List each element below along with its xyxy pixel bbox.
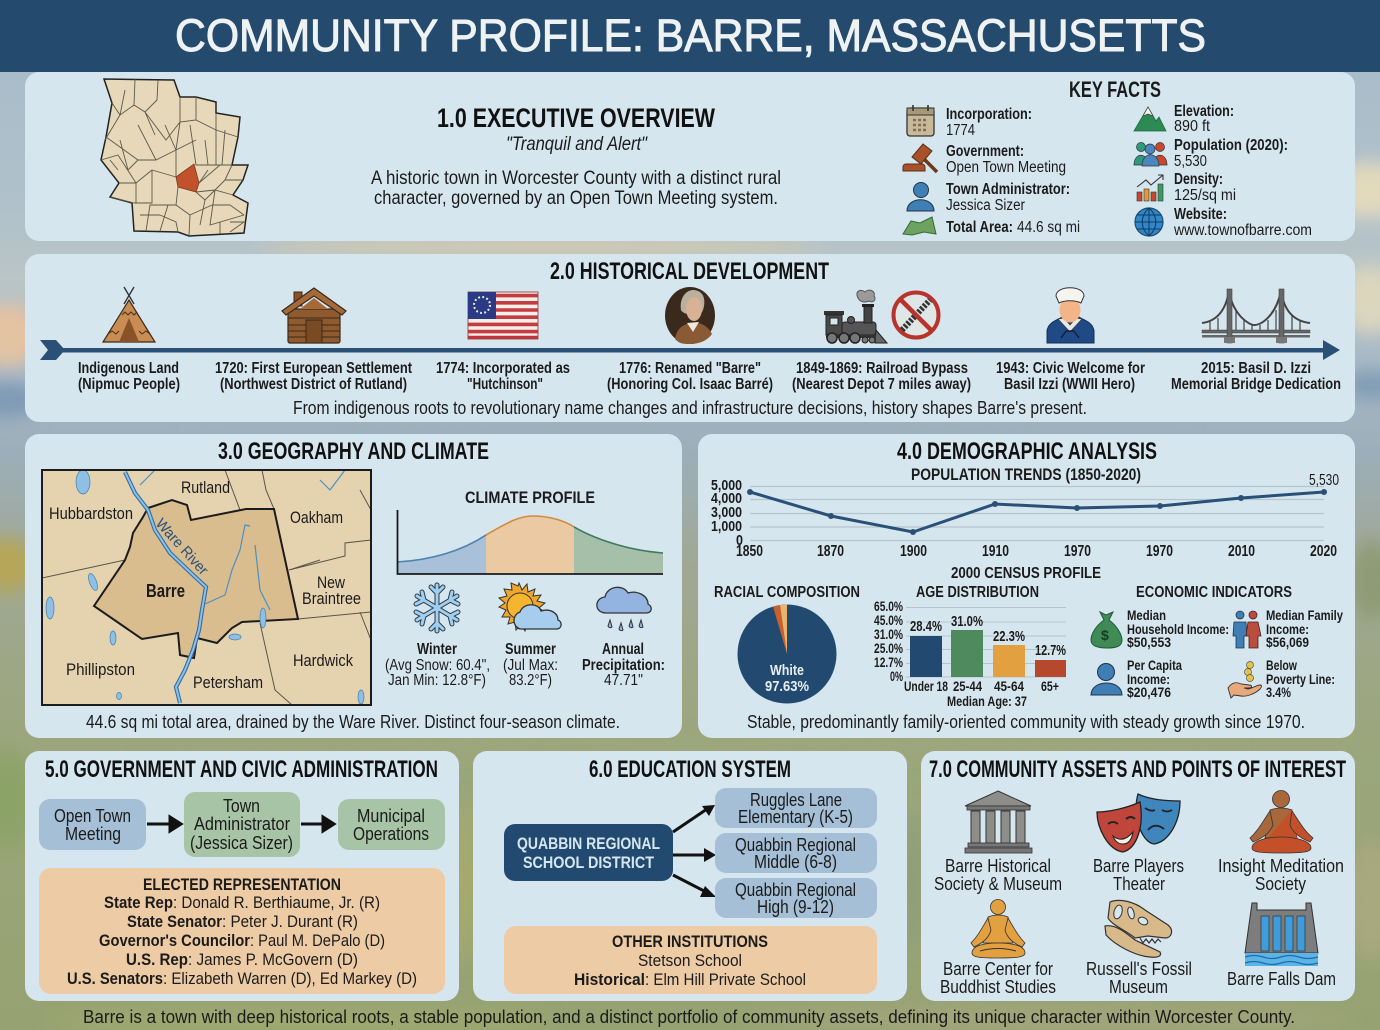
icon: hand with coins (1228, 662, 1262, 698)
label: Buddhist studies (940, 959, 1056, 997)
elected representation box: : Peter J. Durant (R) (222, 912, 358, 931)
timeline arrow (40, 340, 1340, 360)
population line chart: 2010 (1228, 543, 1255, 560)
label: insight meditation: Insight Meditation (1218, 856, 1344, 876)
population line chart: 3,000 (711, 505, 742, 521)
population line chart: 1850 (736, 543, 763, 560)
panel: 1.0 executive overview (25, 72, 1355, 241)
population line chart: POPULATION TRENDS (1850-2020) (911, 465, 1141, 484)
key facts (903, 77, 1312, 239)
map of Barre and neighbours: Hubbardston (49, 504, 133, 523)
other institutions box: Stetson School (638, 951, 742, 970)
label: players theater: Barre Players (1093, 856, 1184, 876)
Barre highlighted (176, 164, 199, 192)
label: Buddhist studies: Barre Center for (943, 959, 1053, 979)
racial composition pie chart: 97.63% (765, 678, 809, 695)
age distribution bar chart: 65.0% (874, 599, 903, 614)
fact: population: 5,530 (1174, 153, 1207, 170)
section heading 3.0: 3.0 GEOGRAPHY AND CLIMATE (218, 438, 489, 465)
population line chart: 0 (736, 533, 743, 549)
population line chart: 1900 (900, 543, 927, 560)
timeline label: 1720: 1720: First European Settlement (215, 360, 413, 377)
fact: incorporation: Incorporation: (946, 106, 1032, 123)
population line chart: 4,000 (711, 491, 742, 507)
summer climate text (503, 641, 558, 689)
fact: density: 125/sq mi (1174, 187, 1236, 204)
age distribution bar chart: Under 18 (904, 679, 948, 694)
racial composition pie chart: RACIAL COMPOSITION (714, 584, 860, 601)
overview text (371, 168, 781, 209)
population line chart: 5,000 (711, 478, 742, 494)
age distribution bar chart: 65+ (1041, 679, 1059, 694)
per capita income: Income: (1127, 672, 1170, 687)
icon: calendar (907, 105, 934, 136)
map of Barre and neighbours: Petersham (193, 673, 263, 692)
timeline label: 1849-1869 (792, 360, 971, 393)
other institutions box (504, 926, 877, 994)
flow box: municipal operations: Operations (353, 824, 429, 844)
footer summary: Barre is a town with deep historical roots, a stable population, and a distinct portfolio of community assets, defining its unique character within Worcester County. (83, 1007, 1295, 1027)
icon: theater masks (1097, 794, 1180, 852)
fact: website (1173, 206, 1312, 239)
icon: dam (1245, 903, 1318, 966)
fact: website: www.townofbarre.com (1173, 222, 1312, 239)
label: falls dam: Barre Falls Dam (1227, 969, 1336, 989)
timeline label: 1720 (215, 360, 413, 393)
school: Quabbin Regional High (715, 878, 877, 918)
timeline label: 1943: 1943: Civic Welcome for (996, 360, 1145, 377)
median household income: Median (1127, 608, 1166, 623)
school: Quabbin Regional Middle: Quabbin Regional (735, 835, 856, 855)
icon: rain cloud (597, 587, 651, 631)
Ware River (125, 472, 206, 703)
label: insight meditation: Society (1255, 874, 1306, 894)
map of Barre and neighbours: Barre (146, 581, 185, 601)
geography summary: 44.6 sq mi total area, drained by the Ware River. Distinct four-season climate. (86, 712, 620, 732)
icon: colonial flag (468, 292, 538, 339)
age distribution bar chart: 12.7% (1035, 642, 1066, 659)
racial composition pie chart (714, 584, 860, 704)
elected representation box (39, 868, 445, 994)
icon: snowflake (416, 585, 458, 631)
median family income: $56,069 (1266, 635, 1309, 650)
median family income: Median Family (1266, 608, 1343, 623)
elected representation box: : Paul M. DePalo (D) (250, 931, 385, 950)
icon: gavel (903, 144, 937, 172)
school: Ruggles Lane (715, 788, 877, 828)
median household income (1127, 608, 1229, 650)
panel: 2.0 historical development (25, 254, 1355, 422)
median household income: Household Income: (1127, 622, 1229, 637)
county map of Worcester with Barre highlighted (101, 79, 248, 236)
school: Ruggles Lane: Ruggles Lane (750, 790, 842, 810)
icon: money bag: $ (1101, 627, 1109, 643)
population line chart: 2020 (1310, 543, 1337, 560)
fact: town administrator: Town Administrator: (946, 181, 1070, 198)
icon: Buddhist meditation figure (971, 900, 1025, 958)
fact: government: Government: (946, 143, 1024, 160)
icon: steam locomotive (824, 290, 887, 343)
timeline label: 1774 (436, 360, 570, 393)
other institutions box: Historical (574, 970, 645, 989)
population line chart: 1,000 (711, 519, 742, 535)
icon: globe (1135, 208, 1163, 236)
summer climate text: 83.2°F) (509, 672, 552, 689)
flow box: town administrator (184, 792, 300, 857)
section heading 2.0: 2.0 HISTORICAL DEVELOPMENT (550, 258, 829, 285)
map of Barre and neighbours: Rutland (181, 478, 230, 497)
icon: log cabin (282, 288, 346, 343)
winter climate text: Jan Min: 12.8°F) (388, 672, 486, 689)
below poverty line (1266, 658, 1335, 700)
panel: 4.0 demographic analysis (698, 434, 1355, 738)
per capita income (1127, 658, 1182, 700)
key facts: KEY FACTS (1069, 77, 1161, 102)
winter climate text (385, 641, 490, 689)
summer climate text: Summer (505, 641, 556, 658)
fact: population (1174, 137, 1288, 170)
section heading 4.0: 4.0 DEMOGRAPHIC ANALYSIS (897, 438, 1157, 465)
timeline label: 1849-1869: (Nearest Depot 7 miles away) (792, 376, 971, 393)
panel: 3.0 geography and climate (25, 434, 682, 738)
flow box: open town meeting: Meeting (65, 824, 121, 844)
overview text: character, governed by an Open Town Meeting system. (374, 188, 778, 209)
fact: government (946, 143, 1066, 176)
fact: total area: 44.6 sq mi (1017, 219, 1080, 236)
other institutions box: : Elm Hill Private School (645, 970, 806, 989)
map of Barre and neighbours: Braintree (302, 589, 361, 608)
elected representation box: : Donald R. Berthiaume, Jr. (R) (173, 893, 380, 912)
median family income (1266, 608, 1343, 650)
timeline label: 1776: (Honoring Col. Isaac Barré) (607, 376, 773, 393)
label: historical society: Barre Historical (945, 856, 1051, 876)
age distribution bar chart: 45-64 (994, 679, 1024, 694)
age distribution bar chart: AGE DISTRIBUTION (916, 584, 1039, 601)
age distribution bar chart: 45.0% (874, 613, 903, 628)
timeline label: indigenous land (78, 360, 180, 393)
flow box: open town meeting: Open Town (54, 806, 131, 826)
fact: density: Density: (1174, 171, 1223, 188)
timeline label: 1776 (607, 360, 773, 393)
age distribution bar chart: 25.0% (874, 641, 903, 656)
timeline label: 1774: "Hutchinson" (467, 376, 543, 393)
map of Barre and neighbours: Oakham (290, 508, 343, 527)
fact: total area: Total Area: (946, 219, 1013, 236)
elected representation box: U.S. Rep (126, 950, 188, 969)
label: players theater (1093, 856, 1184, 894)
census heading: 2000 CENSUS PROFILE (951, 565, 1101, 582)
age distribution bar chart: 22.3% (993, 628, 1025, 645)
flow box: municipal operations (338, 799, 445, 850)
section heading 5.0: 5.0 GOVERNMENT AND CIVIC ADMINISTRATION (45, 756, 438, 783)
fact: website: Website: (1174, 206, 1227, 223)
timeline label: 1849-1869: 1849-1869: Railroad Bypass (796, 360, 968, 377)
flow box: town administrator: (Jessica Sizer) (190, 833, 293, 853)
arrows to schools (673, 805, 716, 897)
other institutions box: OTHER INSTITUTIONS (612, 932, 768, 951)
flow box: municipal operations: Municipal (357, 806, 425, 826)
label: historical society (934, 856, 1062, 894)
elected representation box: State Senator (127, 912, 222, 931)
header banner (0, 0, 1380, 72)
school: Ruggles Lane: Elementary (K-5) (738, 807, 853, 827)
icon: insight meditation figure (1250, 790, 1313, 853)
population line chart: 5,530 (1309, 472, 1339, 489)
elected representation box: Governor's Councilor (99, 931, 250, 950)
age distribution bar chart: 0% (890, 669, 903, 684)
timeline label: indigenous land: Indigenous Land (78, 360, 179, 377)
title: COMMUNITY PROFILE: BARRE, MASSACHUSETTS (175, 10, 1206, 61)
icon: money bag (1091, 612, 1122, 648)
school: Quabbin Regional Middle (715, 833, 877, 873)
median household income: $50,553 (1127, 635, 1171, 650)
median family income: Income: (1266, 622, 1309, 637)
summer climate text: (Jul Max: (503, 657, 558, 674)
school district box: QUABBIN REGIONAL (517, 834, 660, 853)
age distribution bar chart: 28.4% (910, 618, 942, 635)
timeline label: 2015: Memorial Bridge Dedication (1171, 376, 1341, 393)
section heading 6.0: 6.0 EDUCATION SYSTEM (589, 756, 791, 783)
icon: growth chart (1137, 175, 1163, 201)
precipitation text (582, 641, 665, 689)
label: historical society: Society & Museum (934, 874, 1062, 894)
fact: population: Population (2020): (1174, 137, 1288, 154)
precipitation text: Precipitation: (582, 657, 665, 674)
label: insight meditation (1218, 856, 1344, 894)
icon: person (907, 182, 934, 211)
map of Barre and neighbours: Phillipston (66, 660, 135, 679)
section heading 1.0: 1.0 EXECUTIVE OVERVIEW (437, 103, 715, 133)
economic indicators: ECONOMIC INDICATORS (1136, 584, 1292, 601)
age distribution bar chart: 31.0% (951, 613, 983, 630)
timeline label: 2015: 2015: Basil D. Izzi (1201, 360, 1311, 377)
school: Quabbin Regional Middle: Middle (6-8) (754, 852, 837, 872)
population line chart: 1870 (817, 543, 844, 560)
icon: no depot sign (894, 292, 938, 338)
timeline label: 2015 (1171, 360, 1341, 393)
history summary: From indigenous roots to revolutionary name changes and infrastructure decisions, history shapes Barre's present. (293, 398, 1087, 418)
precipitation text: Annual (602, 641, 644, 658)
population line chart: 1970 (1146, 543, 1173, 560)
winter climate text: (Avg Snow: 60.4", (385, 657, 490, 674)
map of Barre and neighbours: Ware River (152, 515, 212, 579)
icon: WWII sailor (1047, 288, 1094, 343)
icon: mountains (1134, 107, 1166, 131)
racial composition pie chart: White (770, 662, 804, 679)
icon: person (1091, 664, 1122, 695)
panel: 6.0 education system (473, 751, 907, 1001)
fact: elevation: Elevation: (1174, 103, 1234, 120)
icon: historical museum (965, 791, 1032, 853)
below poverty line: Below (1266, 658, 1297, 673)
icon: dinosaur fossil skull (1105, 900, 1172, 957)
label: fossil museum: Museum (1109, 977, 1168, 997)
elected representation box: : James P. McGovern (D) (188, 950, 358, 969)
timeline label: indigenous land: (Nipmuc People) (78, 376, 180, 393)
population line chart: 1970 (1064, 543, 1091, 560)
fact: incorporation (946, 106, 1032, 139)
age distribution bar chart: 25-44 (953, 679, 982, 694)
timeline label: 1943: Basil Izzi (WWII Hero) (1004, 376, 1135, 393)
flow box: town administrator: Town (223, 796, 260, 816)
fact: town administrator (946, 181, 1070, 214)
age distribution bar chart: 31.0% (874, 627, 903, 642)
map of Barre and neighbours (42, 470, 371, 705)
label: fossil museum: Russell's Fossil (1086, 959, 1192, 979)
climate profile chart (397, 488, 663, 574)
panel: 5.0 government and civic administration (25, 751, 459, 1001)
climate profile chart: CLIMATE PROFILE (465, 488, 595, 507)
school: Quabbin Regional High: Quabbin Regional (735, 880, 856, 900)
label: Buddhist studies: Buddhist Studies (940, 977, 1056, 997)
timeline label: 1776: 1776: Renamed "Barre" (619, 360, 761, 377)
fact: elevation: 890 ft (1174, 118, 1211, 135)
label: players theater: Theater (1113, 874, 1165, 894)
below poverty line: 3.4% (1266, 685, 1291, 700)
overview text: A historic town in Worcester County with a distinct rural (371, 168, 781, 189)
fact: town administrator: Jessica Sizer (946, 197, 1025, 214)
elected representation box: U.S. Senators (67, 969, 163, 988)
arrow to administrator (147, 817, 181, 831)
school district box: SCHOOL DISTRICT (523, 853, 655, 872)
icon: people group (1134, 142, 1167, 166)
timeline label: 1720: (Northwest District of Rutland) (220, 376, 407, 393)
label: fossil museum (1086, 959, 1192, 997)
elected representation box: State Rep (104, 893, 173, 912)
timeline label: 1943 (996, 360, 1145, 393)
icon: sun and cloud (499, 583, 561, 631)
icon: teepee (103, 287, 155, 342)
fact: elevation (1174, 103, 1234, 135)
per capita income: Per Capita (1127, 658, 1182, 673)
school district box (504, 824, 673, 881)
per capita income: $20,476 (1127, 685, 1171, 700)
icon: family couple (1233, 611, 1261, 648)
panel: 7.0 community assets (921, 751, 1355, 1001)
economic indicators (1091, 584, 1343, 700)
demographic summary: Stable, predominantly family-oriented community with steady growth since 1970. (747, 712, 1305, 732)
age distribution bar chart: 12.7% (874, 655, 903, 670)
elected representation box: : Elizabeth Warren (D), Ed Markey (D) (163, 969, 417, 988)
population line chart (711, 465, 1339, 560)
arrow to operations (301, 817, 334, 831)
fact: total area (946, 219, 1080, 236)
fact: density (1174, 171, 1236, 204)
icon: portrait of Isaac Barre (665, 287, 715, 344)
below poverty line: Poverty Line: (1266, 672, 1335, 687)
precipitation text: 47.71" (604, 672, 643, 689)
elected representation box: ELECTED REPRESENTATION (143, 875, 341, 894)
motto: "Tranquil and Alert" (506, 134, 648, 155)
flow box: town administrator: Administrator (194, 814, 290, 834)
map of Barre and neighbours: Hardwick (293, 651, 353, 670)
flow box: open town meeting (39, 799, 146, 850)
map of Barre and neighbours: New (317, 573, 346, 592)
age distribution bar chart: Median Age: 37 (947, 694, 1027, 709)
age distribution bar chart (874, 584, 1066, 709)
fact: government: Open Town Meeting (946, 159, 1066, 176)
school: Quabbin Regional High: High (9-12) (757, 897, 834, 917)
fact: incorporation: 1774 (946, 122, 975, 139)
icon: suspension bridge (1202, 289, 1310, 343)
population line chart: 1910 (982, 543, 1009, 560)
winter climate text: Winter (417, 641, 457, 658)
timeline label: 1774: 1774: Incorporated as (436, 360, 570, 377)
icon: area map (903, 217, 936, 235)
